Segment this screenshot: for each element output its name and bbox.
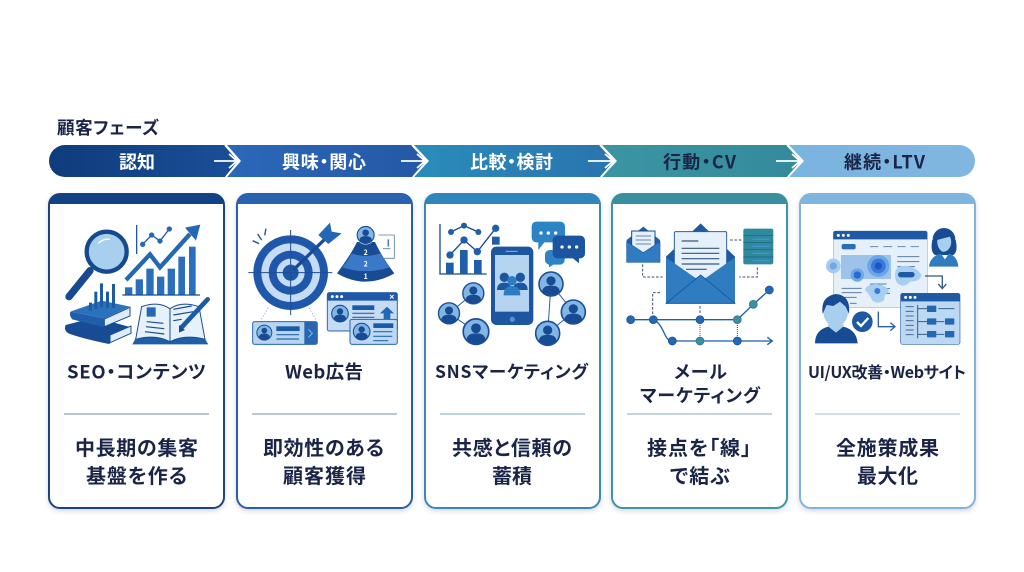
card description: 共感と信頼の	[452, 432, 572, 461]
panel: メールマーケティング: マーケティング	[640, 382, 761, 408]
phase: 継続・LTV: 継続・LTV	[844, 148, 926, 174]
icon: target, funnel and ad cards: 2	[364, 260, 368, 270]
card description: 即効性のある	[263, 432, 384, 461]
panel: UI/UX改善・Webサイト: 最大化	[857, 460, 918, 489]
card title: UI/UX改善・Webサイト	[808, 359, 966, 383]
phase: 認知: 認知	[119, 148, 155, 174]
phase: 行動・CV: 行動・CV	[663, 148, 737, 174]
card title: SNSマーケティング	[435, 359, 589, 384]
panel: SNSマーケティング: 蓄積	[492, 460, 532, 489]
card title: メール	[674, 358, 727, 384]
phase: 認知	[49, 145, 239, 177]
phase: 比較・検討	[414, 145, 615, 177]
panel: SEO・コンテンツ	[49, 194, 224, 508]
panel: Web広告: 顧客獲得	[283, 460, 366, 489]
title: 顧客フェーズ	[57, 115, 160, 140]
card title: Web広告	[285, 358, 363, 384]
icon: target, funnel and ad cards	[248, 223, 397, 344]
panel: SNSマーケティング	[425, 194, 600, 508]
icon: smartphone, social network and chat	[438, 222, 585, 345]
icon: search, growth chart and books	[65, 225, 208, 344]
phase: 行動・CV	[602, 145, 802, 177]
icon: target, funnel and ad cards: 1	[364, 272, 368, 282]
phase arrow bar	[49, 145, 975, 177]
phase: 継続・LTV	[789, 145, 975, 177]
phase: 興味・関心	[227, 145, 427, 177]
panel: Web広告	[237, 194, 412, 508]
icon: target, funnel and ad cards: 2	[364, 248, 368, 258]
panel: メールマーケティング: で結ぶ	[670, 460, 730, 489]
phase: 比較・検討: 比較・検討	[470, 148, 553, 174]
phase: 興味・関心: 興味・関心	[282, 148, 366, 174]
icon: email and journey flow	[627, 223, 773, 345]
card title: SEO・コンテンツ	[67, 358, 206, 384]
phase arrows	[214, 145, 802, 177]
icon: website UX heatmap	[815, 228, 960, 344]
panel: SEO・コンテンツ: 基盤を作る	[86, 460, 187, 489]
panel: メールマーケティング	[612, 194, 787, 508]
card description: 中長期の集客	[75, 432, 198, 461]
card description: 全施策成果	[836, 432, 939, 461]
panel: UI/UX改善・Webサイト	[800, 194, 975, 508]
card description: 接点を「線」	[647, 432, 751, 461]
